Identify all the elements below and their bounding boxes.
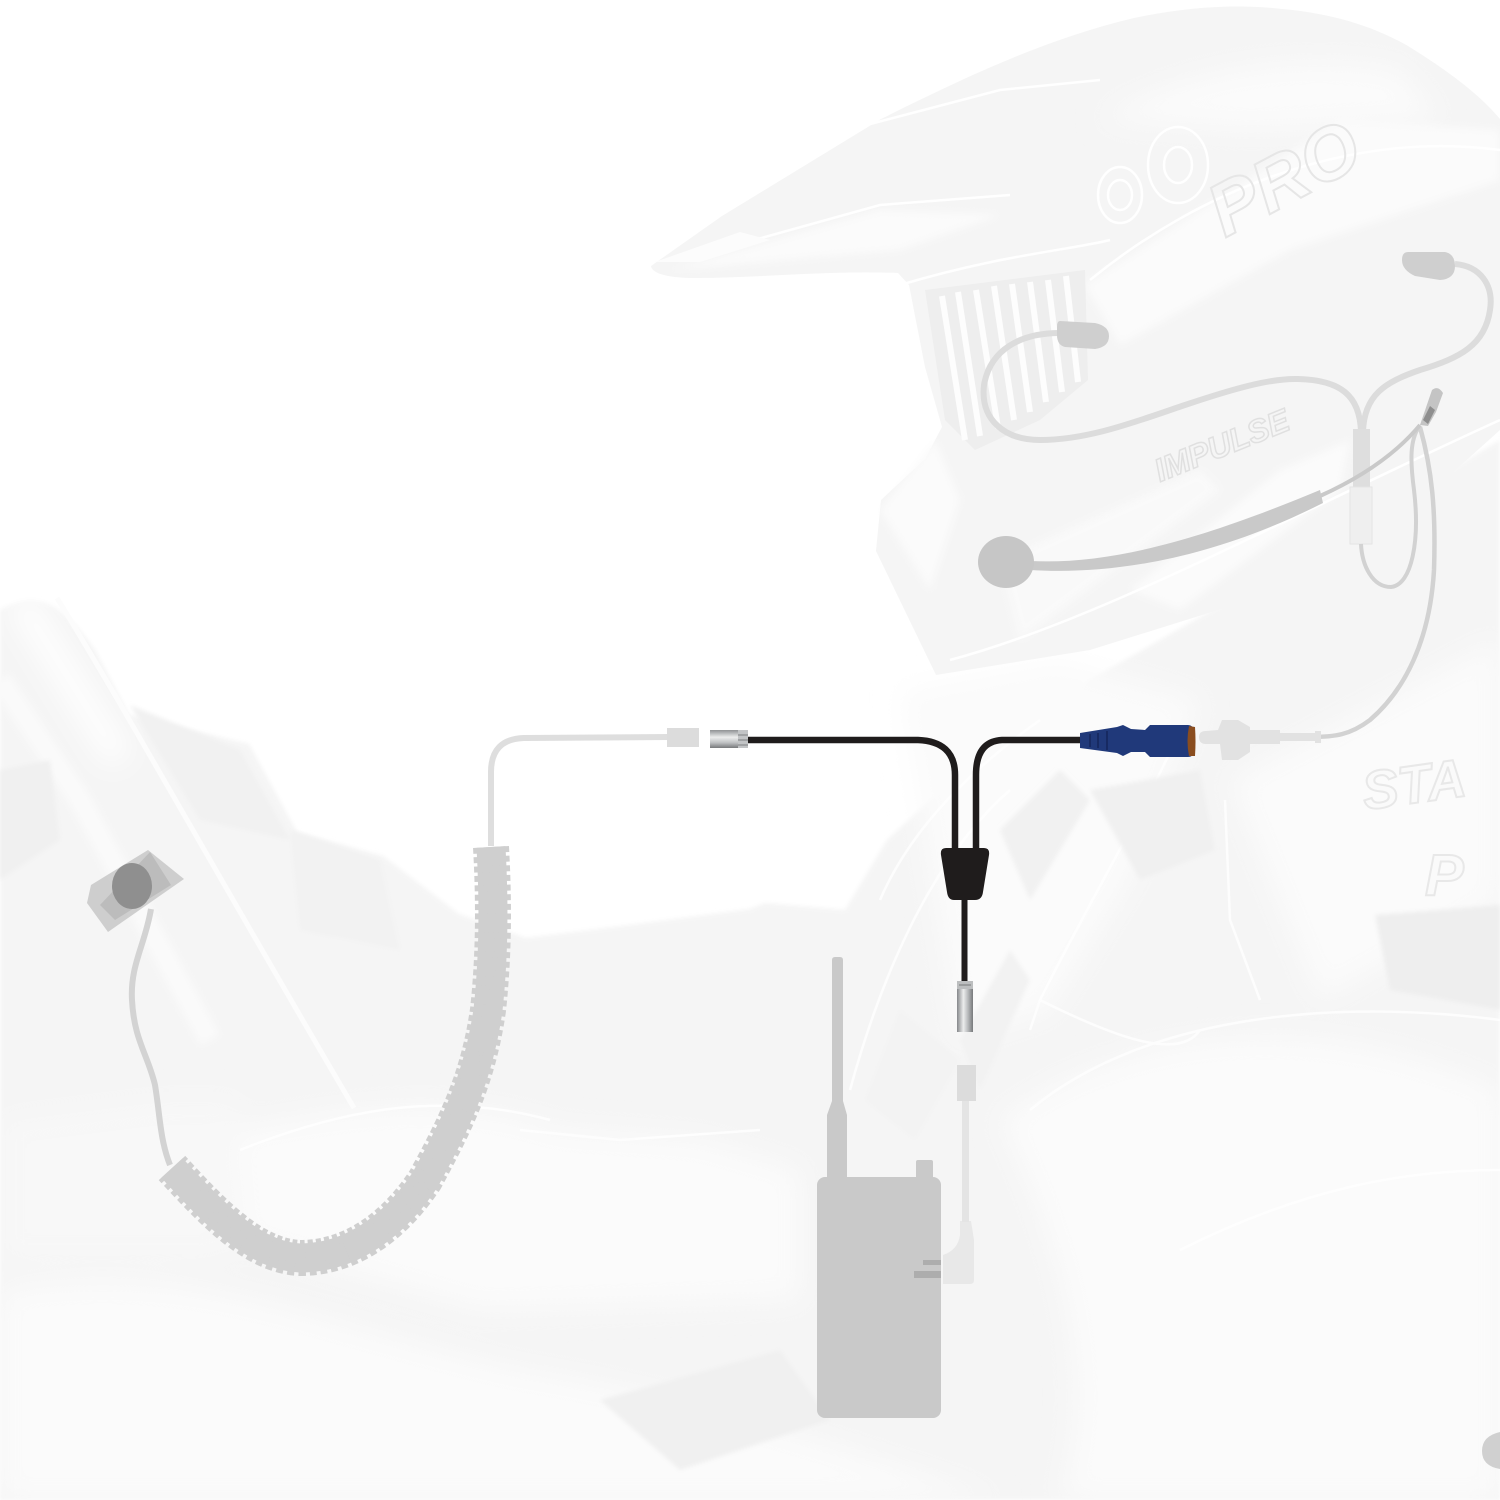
metal connector, left [710,730,748,748]
steering wheel push button [87,850,184,932]
radio body [817,1177,941,1418]
harness webbing [0,705,1215,1470]
faded cable to coil [491,737,670,846]
race suit lettering: P [1425,843,1464,908]
lower cable [962,898,968,983]
suit chest badge [1375,905,1500,1010]
headset left earbud wire [984,333,1361,440]
radio antenna [827,957,847,1177]
molded splitter [941,848,989,900]
helmet side lettering: IMPULSE [1149,401,1296,488]
metal connector, bottom [957,981,973,1032]
boom microphone [978,388,1443,588]
radio knob [916,1160,933,1180]
visor underside [655,232,770,262]
race suit lettering: STA [1358,748,1470,822]
radio [817,957,941,1418]
coiled cord [172,847,493,1258]
photo fold lines [240,720,1500,1250]
blue connector [1080,725,1196,757]
headset junction connector [1350,429,1372,544]
radio right-angle plug [943,1221,974,1284]
radio jack pins [914,1260,941,1278]
long headset cable [1310,427,1434,737]
right earbud [1402,252,1455,280]
headset loop wire [1361,427,1419,587]
faded plug, left [667,728,699,747]
Y-adapter cable assembly [710,725,1196,1032]
lower garment highlights [0,640,1500,1500]
steering wheel band [57,598,354,1108]
brass contact [1188,726,1196,756]
race suit lettering [1358,748,1470,908]
headset right earbud wire [1363,264,1491,432]
radio plug connector [957,1065,976,1101]
faded inline connector, right [1199,720,1321,760]
driver body silhouette [0,440,1500,1500]
button wire [132,909,170,1165]
helmet highlights [670,62,1500,640]
left earbud [1057,321,1109,349]
radio plug cable [962,1101,969,1222]
helmet shell [651,6,1500,675]
faded cushion at lower right [1482,1432,1500,1469]
helmet vents [700,80,1500,660]
goggle opening with stripes [925,270,1088,450]
right cable [976,740,1082,850]
helmet logo: PRO [1194,104,1374,252]
left cable [747,740,955,850]
